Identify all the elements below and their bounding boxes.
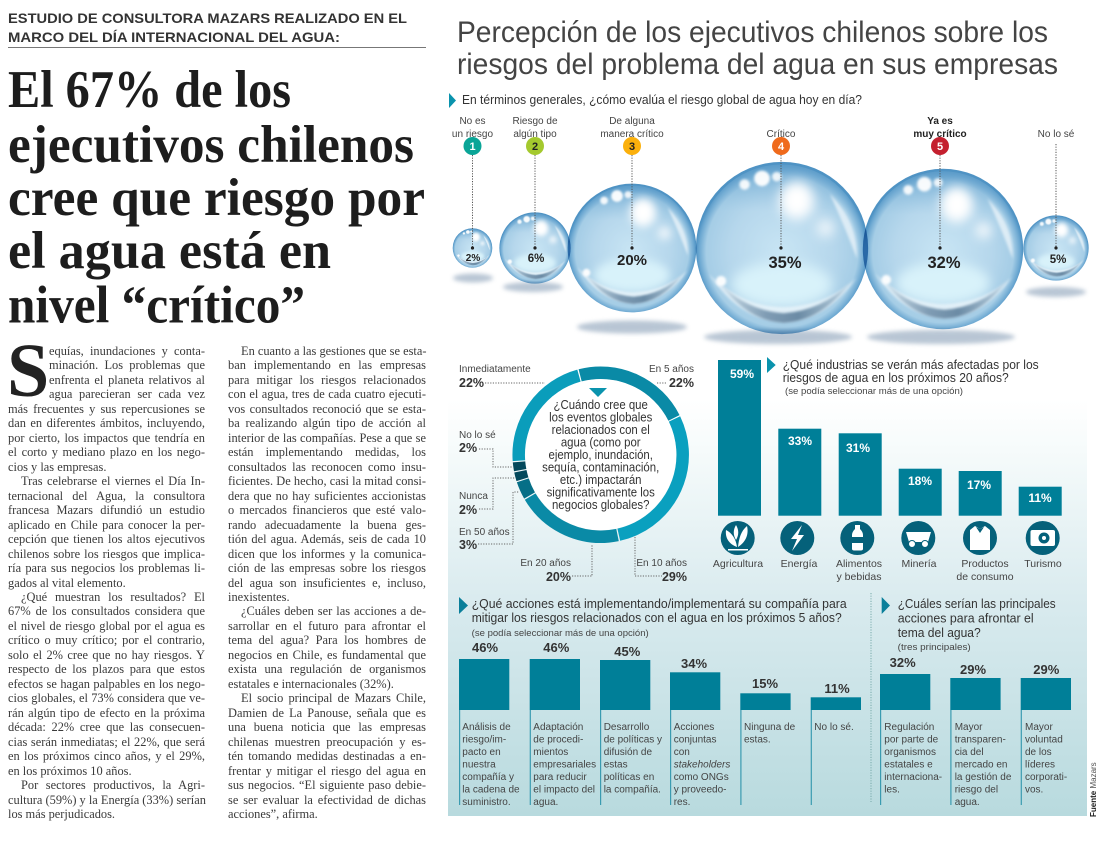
category labels: industries: Turismo xyxy=(1024,558,1062,570)
icon: mining truck xyxy=(901,521,935,555)
option text: main actions: por parte de xyxy=(884,734,939,746)
paragraph: future actions: negocios en Chile, es fundamental que xyxy=(228,648,426,662)
dotted leaders xyxy=(472,144,1056,248)
option text: main actions: agua. xyxy=(955,797,980,808)
paragraph: company measures: ficientes. De hecho, casi la mitad consi- xyxy=(228,474,426,488)
option text: company actions: conjuntas xyxy=(674,734,717,746)
bar values: main actions: 29% xyxy=(1033,662,1060,677)
chart: company actions xyxy=(459,596,861,808)
bubble: 2% xyxy=(453,228,492,268)
paragraph: Mazars study: gados al vital elemento. xyxy=(8,576,126,590)
paragraph: results: respecto de los plazos para que estos xyxy=(8,662,205,676)
paragraph: partner quote: acciones”, afirma. xyxy=(228,807,318,821)
option text: main actions: cia del xyxy=(955,747,984,758)
paragraph: future actions xyxy=(228,604,426,691)
title: infographic heading xyxy=(457,16,1058,81)
paragraph: company measures: ción de las empresas sobre los riesgos xyxy=(228,561,426,575)
category labels: industries: Energía xyxy=(781,558,818,570)
title: article headline xyxy=(8,61,425,334)
donut labels: En 50 años xyxy=(459,527,510,538)
option text: main actions: estatales e xyxy=(884,760,933,770)
category labels: industries: Agricultura xyxy=(713,558,763,570)
option text: main actions: Regulación xyxy=(884,722,934,733)
bar values: company actions: 46% xyxy=(543,640,570,655)
paragraph: results: rán algún tipo de efecto en la próxima xyxy=(8,706,205,720)
category labels: industries: Minería xyxy=(901,558,937,570)
paragraph: company measures: están implementando medidas, los xyxy=(228,445,426,459)
title: infographic heading: riesgos del problema del agua en sus empresas xyxy=(457,48,1058,81)
question: industries: riesgos de agua en los próximos 20 años? xyxy=(783,371,1009,385)
panel: tinted background xyxy=(448,400,1087,816)
option text: company actions: con xyxy=(674,747,690,758)
question: company actions xyxy=(459,596,847,639)
icon: consumer product shirt xyxy=(963,521,997,555)
donut question: los eventos globales xyxy=(549,410,652,425)
donut percentages: 22% xyxy=(669,376,694,390)
paragraph: company measures: interior de las compañías. Pese a que se xyxy=(228,431,426,445)
option text: main actions: les. xyxy=(884,784,900,796)
donut labels: En 5 años xyxy=(649,364,694,375)
bubble percentages: 35% xyxy=(768,254,802,272)
scale labels: manera crítico xyxy=(600,129,664,140)
category labels: industries: Productos xyxy=(961,558,1009,570)
option text: company actions: políticas en xyxy=(604,772,654,783)
title: article headline: el agua está en xyxy=(8,222,331,280)
paragraph: sectors: Por sectores productivos, la Agri- xyxy=(21,778,205,792)
chart: donut when will events impact xyxy=(459,343,712,584)
icon: agriculture xyxy=(721,521,755,555)
donut question: ejemplo, inundación, xyxy=(548,447,653,462)
paragraph: intro: minación. Los problemas que xyxy=(49,358,205,372)
bar values: industries: 59% xyxy=(730,367,754,381)
category labels: industries: y bebidas xyxy=(837,571,881,583)
donut question: agua (como por xyxy=(561,435,641,450)
option text: company actions: Ninguna de xyxy=(744,722,796,733)
bubble: 6% xyxy=(499,212,571,284)
option text: company actions: Análisis de xyxy=(462,722,511,733)
title: article headline: nivel “crítico” xyxy=(8,276,305,334)
paragraph: Mazars study: ría para sus negocios los problemas li- xyxy=(8,561,205,575)
bar values: main actions: 32% xyxy=(890,655,916,670)
scale labels: muy crítico xyxy=(913,129,967,140)
text column 2 xyxy=(228,344,426,821)
heading: kicker: ESTUDIO DE CONSULTORA MAZARS REALIZADO EN EL xyxy=(8,11,407,26)
leader dots xyxy=(471,246,1058,250)
option text: company actions: Desarrollo xyxy=(604,722,650,733)
scale labels: De alguna xyxy=(609,116,655,127)
heading: kicker xyxy=(8,11,426,48)
option text: main actions: voluntad xyxy=(1025,734,1063,746)
paragraph: company measures: consultados las reconocen como insu- xyxy=(228,460,426,474)
option text: main actions: vos. xyxy=(1025,784,1043,796)
bar values: company actions: 45% xyxy=(614,644,641,659)
bubble shadows xyxy=(453,274,1086,344)
paragraph: intro: el corto y mediano plazo en los nego- xyxy=(8,445,205,459)
question: company actions: ¿Qué acciones está implementando/implementará su compañía para xyxy=(472,596,847,611)
bar values: company actions: 15% xyxy=(752,676,778,691)
donut question: negocios globales? xyxy=(552,497,650,512)
paragraph: future actions: tema del agua? Para los hombres de xyxy=(228,633,426,647)
bar values: industries: 31% xyxy=(846,441,870,455)
donut labels: Inmediatamente xyxy=(459,364,531,375)
paragraph: intro: enfrenta el planeta relativos al xyxy=(49,373,205,387)
question: industries xyxy=(767,357,1039,397)
scale labels: Riesgo de xyxy=(512,116,558,127)
paragraph: company measures: para mitigar los riesgos relacionados xyxy=(228,373,426,387)
paragraph: results xyxy=(8,590,205,778)
bars: industries xyxy=(718,360,1062,516)
category labels: industries: Alimentos xyxy=(836,558,882,570)
bar values: industries xyxy=(730,367,1052,505)
option text: company actions xyxy=(462,722,854,808)
bubble percentages: 2% xyxy=(466,253,480,264)
donut labels: En 20 años xyxy=(520,558,571,569)
stems: main actions xyxy=(881,710,1021,805)
question: main actions: acciones para afrontar el xyxy=(898,610,1034,626)
title: article headline: El 67% de los xyxy=(8,61,291,119)
option text: company actions: mientos xyxy=(533,747,568,758)
category labels: industries xyxy=(713,558,1062,583)
scale number badges: 2 xyxy=(532,141,538,153)
donut centre fill xyxy=(525,379,676,530)
option text: company actions: de políticas y xyxy=(604,734,662,746)
paragraph: Mazars study: aplicado en Chile para conocer la per- xyxy=(8,518,205,532)
bars: company actions xyxy=(459,659,861,710)
bubble: 5% xyxy=(1023,215,1089,281)
question: company actions: (se podía seleccionar más de una opción) xyxy=(472,628,649,639)
option text: company actions: difusión de xyxy=(604,747,653,758)
option text: company actions: el impacto del xyxy=(533,784,595,796)
paragraph: company measures: ban implementando en las empresas xyxy=(228,358,426,372)
bubble percentages xyxy=(466,252,1066,272)
paragraph: results: 67% de los consultados considera que xyxy=(8,604,205,618)
paragraph: sectors: cultura (59%) y la Energía (33%) serían xyxy=(8,793,206,807)
paragraph: partner quote: se ser evaluar la efectividad de dichas xyxy=(228,793,426,807)
paragraph: company measures: rando adecuadamente la buena ges- xyxy=(228,518,426,532)
paragraph: results: en los próximos cinco años, y el 29%, xyxy=(8,749,205,763)
donut percentages: 2% xyxy=(459,441,477,455)
paragraph: company measures: dera que no hay suficientes accionistas xyxy=(228,489,426,503)
scale number badges: 5 xyxy=(937,141,943,153)
option text: company actions: de procedi- xyxy=(533,734,583,746)
title: article headline: ejecutivos chilenos xyxy=(8,116,414,174)
paragraph: future actions: ¿Cuáles deben ser las acciones a de- xyxy=(241,604,426,618)
option text: company actions: agua. xyxy=(533,797,558,808)
paragraph: future actions: estatales e internacionales (32%). xyxy=(228,677,394,691)
paragraph: company measures: vos consultados reconoció que se esta- xyxy=(228,402,426,416)
paragraph: partner quote: El socio principal de Mazars Chile, xyxy=(241,691,426,705)
donut question: etc.) impactarán xyxy=(560,472,642,487)
paragraph: results: el nivel de riesgo global por el agua es xyxy=(8,619,205,633)
option text: main actions: mercado en xyxy=(955,760,1008,770)
section: global water risk bubbles xyxy=(449,93,1089,344)
option text: main actions xyxy=(884,722,1067,808)
paragraph: results: cias serán inmediatas; el 22%, que será xyxy=(8,735,205,749)
paragraph: intro: más frecuentes y sus repercusiones se xyxy=(8,402,205,416)
donut percentages: 29% xyxy=(662,570,687,584)
paragraph: future actions: exista una regulación de organismos xyxy=(228,662,426,676)
scale number badges: 1 xyxy=(469,141,476,153)
bars: main actions xyxy=(880,674,1071,710)
scale number badges xyxy=(464,137,949,155)
paragraph: intro: dan en diferentes ámbitos, incluyendo, xyxy=(8,416,205,430)
bar values: main actions: 29% xyxy=(960,662,986,677)
icon: camera xyxy=(1026,521,1060,555)
paragraph: company measures: En cuanto a las gestiones que se esta- xyxy=(241,344,426,358)
chart: industries most affected xyxy=(713,357,1062,583)
donut question: relacionados con el xyxy=(552,422,650,437)
text column 1 xyxy=(8,344,206,821)
option text: main actions: Mayor xyxy=(955,722,983,733)
bar values: company actions: 46% xyxy=(472,640,498,655)
paragraph: results: en los próximos 10 años. xyxy=(8,764,132,778)
paragraph: partner quote: chilenas muestren preocupación y es- xyxy=(228,735,426,749)
donut pointer xyxy=(589,388,607,397)
paragraph: intro: por cierto, los impactos que tendría en xyxy=(8,431,205,445)
paragraph: company measures: con el agua, tres de cada cuatro ejecuti- xyxy=(228,387,426,401)
paragraph: Mazars study: ternacional del Agua, la consultora xyxy=(8,489,205,503)
donut labels: No lo sé xyxy=(459,430,496,441)
paragraph: results: cios globales, el 73% considera que ve- xyxy=(8,691,205,705)
icon: energy xyxy=(780,521,814,555)
option text: main actions: líderes xyxy=(1025,760,1055,770)
bubble percentages: 32% xyxy=(927,254,961,272)
question: main actions: (tres principales) xyxy=(898,642,971,653)
scale labels: algún tipo xyxy=(513,129,557,140)
option text: company actions: riesgo/im- xyxy=(462,734,506,746)
donut percentages: 2% xyxy=(459,503,477,517)
paragraph: Mazars study: chilenos sobre los riesgos que implica- xyxy=(8,547,205,561)
category labels: industries: de consumo xyxy=(956,571,1014,583)
option text: company actions: suministro. xyxy=(462,797,511,808)
option text: company actions: Acciones xyxy=(674,722,714,733)
question: main actions: tema del agua? xyxy=(898,625,981,640)
question: industries: (se podía seleccionar más de una opción) xyxy=(785,386,963,397)
question: main actions xyxy=(882,596,1056,653)
paragraph: sectors: los más perjudicados. xyxy=(8,807,115,821)
question: company actions: mitigar los riesgos relacionados con el agua en los próximos 5 años? xyxy=(472,610,842,625)
donut percentages: 22% xyxy=(459,376,484,390)
paragraph: intro: equías, inundaciones y conta- xyxy=(49,344,205,358)
paragraph: company measures: dicen que los informes y la comunica- xyxy=(228,547,426,561)
title: infographic heading: Percepción de los ejecutivos chilenos sobre los xyxy=(457,16,1048,49)
scale labels: No es xyxy=(459,116,486,127)
option text: company actions: estas. xyxy=(744,734,771,746)
option text: company actions: para reducir xyxy=(533,772,587,783)
paragraph: results: efectos se hagan palpables en los nego- xyxy=(8,677,205,691)
question: global risk: En términos generales, ¿cómo evalúa el riesgo global de agua hoy en día? xyxy=(462,93,862,107)
paragraph: Mazars study xyxy=(8,474,205,590)
paragraph: partner quote: Damien de La Panouse, señala que es xyxy=(228,706,426,720)
option text: company actions: nuestra xyxy=(462,760,496,770)
question: main actions: ¿Cuáles serían las principales xyxy=(898,596,1056,611)
paragraph: intro: agua parecieran ser cada vez xyxy=(49,387,205,401)
bubble: 35% xyxy=(696,162,868,334)
paragraph: future actions: sarrollar en el futuro para afrontar el xyxy=(228,619,426,633)
paragraph: partner quote: tén tomando medidas destinadas a en- xyxy=(228,749,426,763)
option text: company actions: Adaptación xyxy=(533,722,583,733)
paragraph: intro: cios y las empresas. xyxy=(8,460,106,474)
donut question: significativamente los xyxy=(547,485,655,500)
donut percentages: 20% xyxy=(546,570,571,584)
scale number badges: 3 xyxy=(629,141,635,153)
scale labels: No lo sé xyxy=(1038,129,1075,140)
donut labels: En 10 años xyxy=(636,558,687,569)
title: article headline: cree que riesgo por xyxy=(8,169,425,227)
paragraph: partner quote xyxy=(228,691,426,821)
paragraph: partner quote: una buena noticia que las empresas xyxy=(228,720,426,734)
donut question: sequía, contaminación, xyxy=(542,460,659,475)
bar values: company actions: 11% xyxy=(824,681,850,696)
paragraph: company measures: o mercados financieros que esté valo- xyxy=(228,503,426,517)
bar values: industries: 11% xyxy=(1028,491,1052,505)
scale labels: Crítico xyxy=(767,129,796,140)
paragraph: company measures: inexistentes. xyxy=(228,590,290,604)
bubble: 32% xyxy=(863,169,1023,329)
option text: main actions: internaciona- xyxy=(884,772,942,783)
paragraph: results: década: 22% cree que las consecuen- xyxy=(8,720,205,734)
paragraph: partner quote: sus negocios. “El siguiente paso debie- xyxy=(228,778,426,792)
bar values: main actions xyxy=(890,655,1060,677)
donut percentages xyxy=(459,376,694,584)
option text: company actions: la cadena de xyxy=(462,784,520,796)
paragraph: results: crítico o muy crítico; por el contrario, xyxy=(8,633,205,647)
donut labels xyxy=(459,364,694,569)
option text: company actions: compañía y xyxy=(462,772,514,783)
chart: main actions xyxy=(880,596,1071,808)
paragraph: sectors xyxy=(8,778,206,821)
bar values: industries: 33% xyxy=(788,434,812,448)
scale number badges: 4 xyxy=(778,141,785,153)
option text: company actions: estas xyxy=(604,760,628,770)
bar values: company actions: 34% xyxy=(681,656,707,671)
bubble percentages: 20% xyxy=(617,252,647,269)
drop cap: S xyxy=(7,329,49,413)
bubble: 20% xyxy=(568,184,696,312)
option text: main actions: de los xyxy=(1025,747,1052,758)
paragraph: Mazars study: Tras celebrarse el viernes el Día In- xyxy=(21,474,205,488)
paragraph: partner quote: frentar y mitigar el riesgo del agua en xyxy=(228,764,426,778)
option text: main actions: la gestión de xyxy=(955,772,1012,783)
bar values: industries: 18% xyxy=(908,474,932,488)
donut percentages: 3% xyxy=(459,538,477,552)
option text: company actions: y proveedo- xyxy=(674,784,727,796)
bar values: industries: 17% xyxy=(967,478,991,492)
option text: main actions: corporati- xyxy=(1025,772,1067,783)
option text: company actions: No lo sé. xyxy=(814,722,854,733)
question: industries: ¿Qué industrias se verán más afectadas por los xyxy=(783,358,1039,372)
option text: main actions: organismos xyxy=(884,747,936,758)
paragraph: results: solo el 2% cree que no hay riesgos. Y xyxy=(8,648,205,662)
paragraph: Mazars study: cepción que tienen los altos ejecutivos xyxy=(8,532,205,546)
paragraph: intro xyxy=(8,344,205,474)
scale labels xyxy=(452,116,1075,140)
option text: main actions: Mayor xyxy=(1025,722,1053,733)
option text: company actions: pacto en xyxy=(462,747,501,758)
bar values: company actions xyxy=(472,640,850,696)
donut ring xyxy=(489,343,712,566)
donut question xyxy=(542,397,659,512)
paragraph: company measures xyxy=(228,344,426,604)
bubble percentages: 5% xyxy=(1050,254,1066,266)
paragraph: company measures: ba realizando algún tipo de acción al xyxy=(228,416,426,430)
paragraph: results: ¿Qué muestran los resultados? El xyxy=(21,590,205,604)
donut question: ¿Cuándo cree que xyxy=(554,397,648,412)
option text: company actions: la compañía. xyxy=(604,784,661,796)
option text: main actions: transparen- xyxy=(955,734,1006,746)
stems: company actions xyxy=(460,710,811,805)
option text: company actions: res. xyxy=(674,797,690,808)
scale labels: un riesgo xyxy=(452,129,494,140)
option text: company actions: stakeholders xyxy=(674,760,730,770)
bubble percentages: 6% xyxy=(528,253,544,265)
option text: company actions: como ONGs xyxy=(674,772,729,783)
donut leaders xyxy=(478,383,667,576)
heading: kicker: MARCO DEL DÍA INTERNACIONAL DEL AGUA: xyxy=(8,30,340,45)
paragraph: company measures: del agua son insuficientes e, incluso, xyxy=(228,576,426,590)
option text: main actions: riesgo del xyxy=(955,784,998,796)
scale labels: Ya es xyxy=(927,116,953,127)
paragraph: company measures: tión del agua. Además, seis de cada 10 xyxy=(228,532,426,546)
option text: company actions: empresariales xyxy=(533,760,596,770)
donut labels: Nunca xyxy=(459,491,488,502)
paragraph: Mazars study: francesa Mazars difundió un estudio xyxy=(8,503,205,517)
icon: bottle xyxy=(840,521,874,555)
source credit: Fuente Mazars xyxy=(1089,762,1098,817)
